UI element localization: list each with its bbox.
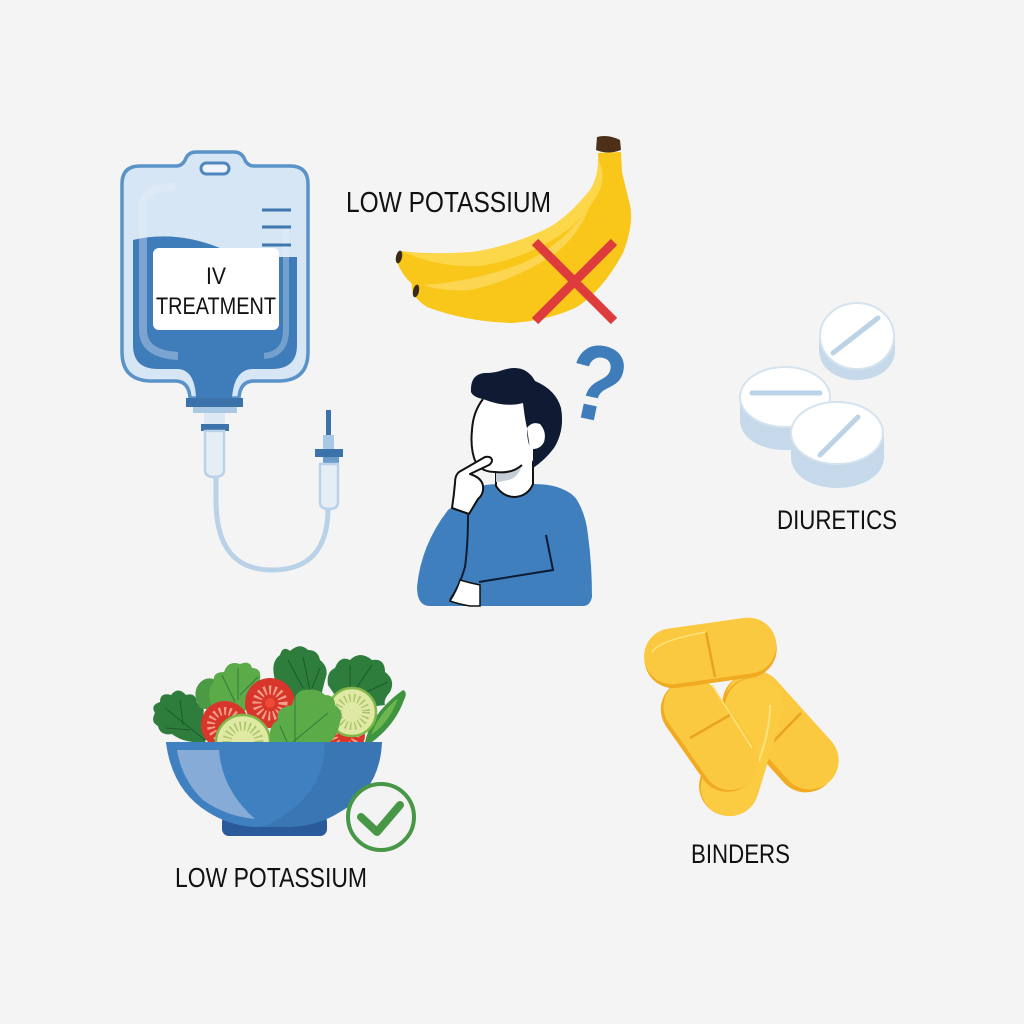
bowl	[166, 742, 382, 836]
icon: banana with red cross	[395, 136, 631, 323]
capsule: right	[710, 659, 851, 805]
capsule: top	[640, 614, 781, 692]
red cross	[535, 242, 614, 321]
hand on chin	[452, 457, 492, 514]
label: IV treatment	[153, 248, 279, 330]
sleeve and arm lines	[450, 515, 553, 600]
icon: salad bowl with check	[153, 646, 414, 850]
capsule: left	[649, 667, 770, 804]
icon: question mark: ?	[556, 320, 637, 448]
tablet: left	[740, 367, 830, 450]
heading: low potassium salad label: LOW POTASSIUM	[175, 862, 367, 893]
heading: diuretics label: DIURETICS	[777, 505, 897, 535]
label: IV treatment: TREATMENT	[156, 293, 276, 320]
capsule: bottom	[692, 670, 790, 823]
icon: IV bag with tube	[122, 152, 343, 570]
cucumber slices	[216, 688, 376, 769]
label: IV treatment: IV	[206, 263, 226, 290]
icon: diuretic tablets	[740, 303, 895, 488]
heading: binders label: BINDERS	[691, 839, 790, 869]
heading: low potassium banana label: LOW POTASSIUM	[346, 187, 551, 219]
tablet: front	[791, 402, 884, 488]
check badge	[348, 784, 414, 850]
icon: binder capsules	[640, 614, 851, 823]
tablet: top right	[819, 303, 895, 380]
icon: thinking person	[417, 368, 592, 606]
tomato slices	[201, 678, 365, 755]
